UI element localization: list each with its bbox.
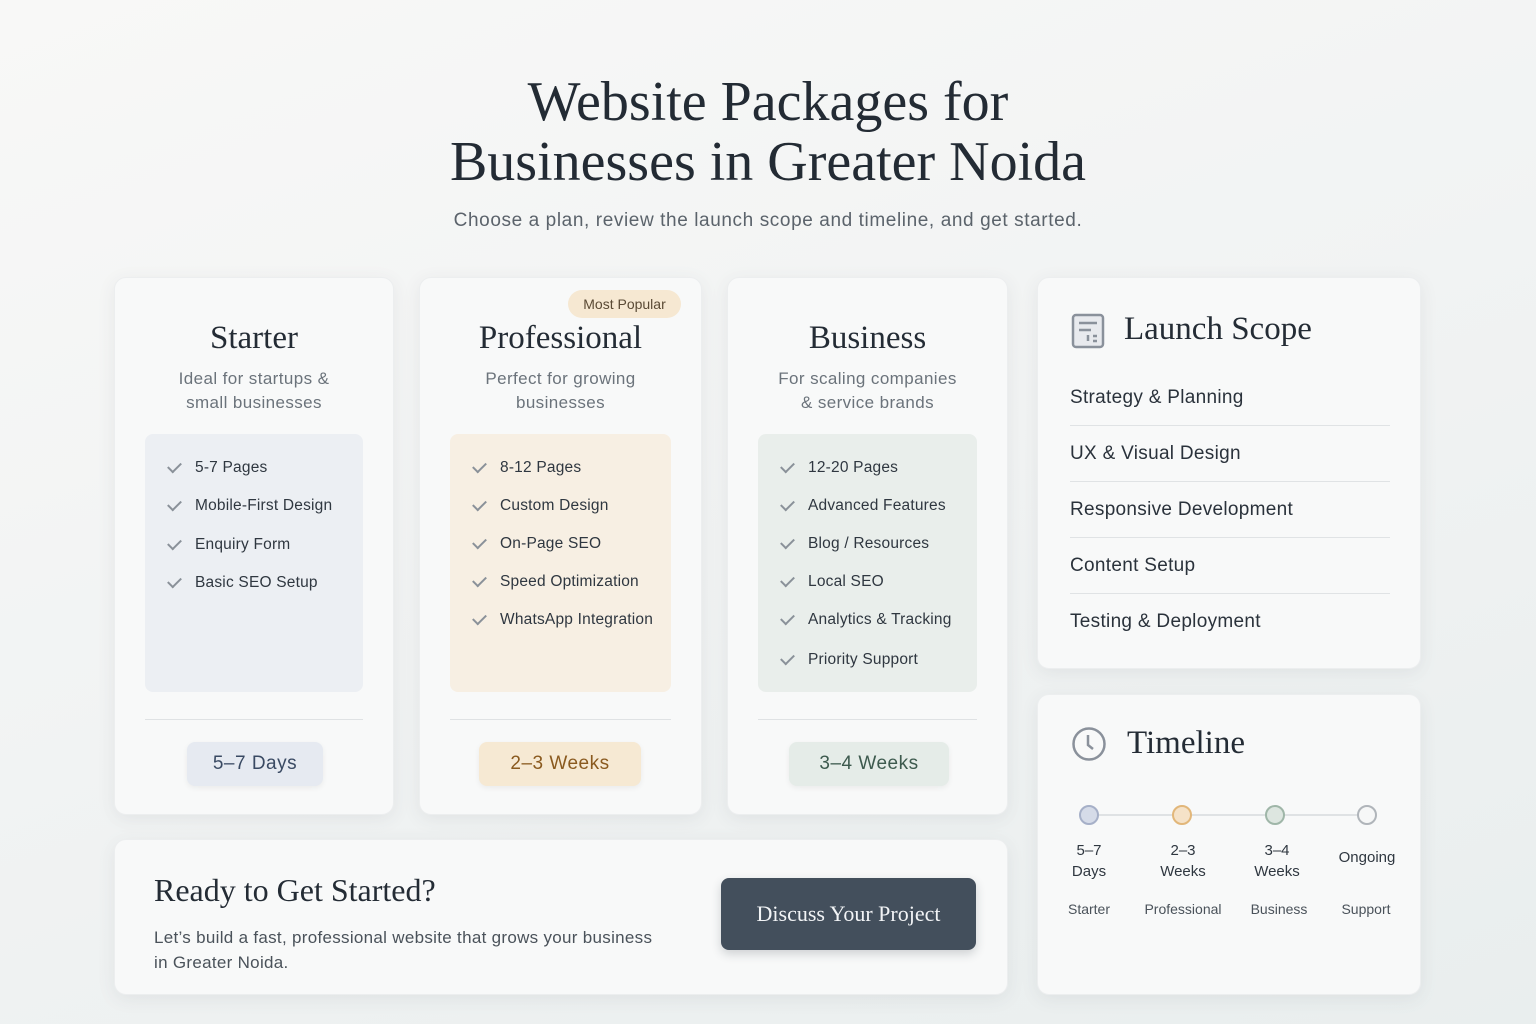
feature list: business: Priority Support [808,651,918,668]
list: scope items: Content Setup [1070,555,1195,576]
chart: timeline steps: 3–4 [1264,842,1290,859]
text: starter description: small businesses [186,393,322,412]
panel: business [727,277,1008,815]
title: Businesses in Greater Noida [450,131,1086,193]
pill: 3-4 weeks [789,742,949,786]
heading: starter: Starter [210,320,298,356]
feature list: starter [145,434,363,692]
chart: timeline steps: Weeks [1254,863,1300,880]
panel: professional [419,277,702,815]
text: professional description [485,369,636,412]
feature list: starter: Mobile-First Design [195,497,332,514]
chart: timeline steps: Professional [1144,901,1222,917]
chart: timeline steps: Days [1072,863,1106,880]
feature list: professional: On-Page SEO [500,535,601,552]
text: starter description [179,369,329,412]
title: Website Packages for [528,71,1008,133]
chart: timeline steps: Business [1251,901,1307,917]
feature list: business: Blog / Resources [808,535,929,552]
icon: clock [1072,727,1106,761]
feature list: professional [450,434,671,692]
pill: 5-7 days [187,742,323,786]
feature list: professional: Custom Design [500,497,609,514]
heading: professional: Professional [479,320,642,356]
feature list: starter: Basic SEO Setup [195,574,318,591]
panel: launch scope [1037,277,1421,669]
feature list: business: Analytics & Tracking [808,611,952,628]
text: cta description: Let’s build a fast, professional website that grows your business [154,928,652,947]
chart: timeline steps: Weeks [1160,863,1206,880]
panel: starter [114,277,394,815]
text: professional description: Perfect for growing [485,369,636,388]
pill: 3-4 weeks: 3–4 Weeks [819,753,919,774]
text: cta description [154,928,652,972]
text: business description: & service brands [801,393,934,412]
list: scope items: Strategy & Planning [1070,387,1244,408]
heading: ready to get started: Ready to Get Started? [154,872,436,908]
feature list: business: 12-20 Pages [808,459,898,476]
feature list: professional: Speed Optimization [500,573,639,590]
feature list: business: Advanced Features [808,497,946,514]
badge: most popular [568,290,681,318]
chart: timeline steps: Starter [1068,901,1110,917]
feature list: starter: 5-7 Pages [195,459,267,476]
feature list: starter: Enquiry Form [195,536,290,553]
heading: launch scope: Launch Scope [1124,311,1312,347]
text: professional description: businesses [516,393,605,412]
list: scope items [1070,387,1390,632]
panel: timeline [1037,694,1421,995]
list: scope items: Responsive Development [1070,499,1293,520]
chart: timeline steps [1068,805,1395,917]
feature list: business [758,434,977,692]
chart: timeline steps: 2–3 [1170,842,1196,859]
title [450,71,1086,193]
text: business description [778,369,957,412]
badge: most popular: Most Popular [583,296,666,312]
panel: call to action [114,839,1008,995]
feature list: business: Local SEO [808,573,884,590]
chart: timeline steps: Support [1341,901,1391,917]
pill: 2-3 weeks: 2–3 Weeks [510,753,610,774]
button: discuss your project: Discuss Your Project [757,901,940,926]
icon: document [1072,314,1104,348]
pill: 2-3 weeks [479,742,641,786]
chart: timeline steps: 5–7 [1076,842,1102,859]
chart: timeline steps: Ongoing [1339,849,1395,866]
button: discuss your project [721,878,976,950]
subtitle: Choose a plan, review the launch scope and timeline, and get started. [454,210,1082,231]
text: business description: For scaling companies [778,369,957,388]
pill: 5-7 days: 5–7 Days [213,753,297,774]
text: starter description: Ideal for startups & [179,369,329,388]
feature list: professional: WhatsApp Integration [500,611,653,628]
feature list: professional: 8-12 Pages [500,459,581,476]
heading: timeline: Timeline [1127,725,1245,761]
heading: business: Business [809,320,926,356]
list: scope items: Testing & Deployment [1070,611,1261,632]
text: cta description: in Greater Noida. [154,953,289,972]
list: scope items: UX & Visual Design [1070,443,1241,464]
